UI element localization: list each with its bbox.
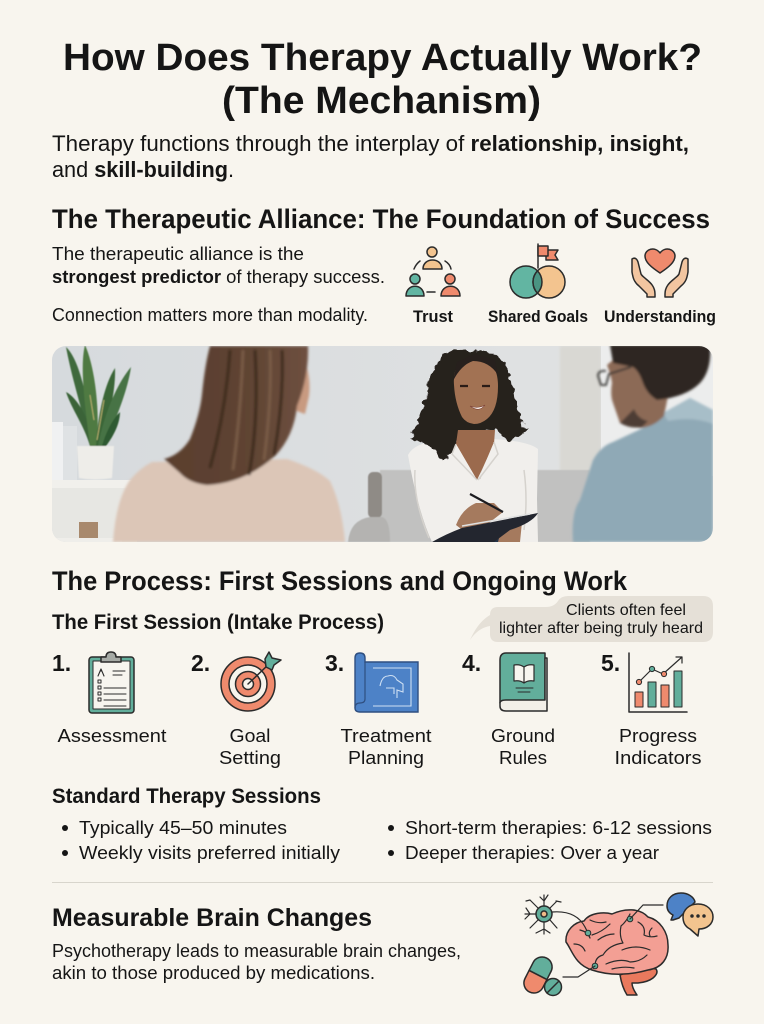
step 5: progress indicators: Progress bbox=[619, 725, 697, 746]
step 3: treatment planning: Treatment bbox=[340, 725, 432, 746]
step 5: progress indicators: 5. bbox=[601, 650, 620, 676]
label: shared goals: Shared Goals bbox=[488, 308, 588, 326]
icon: trust bbox=[406, 247, 460, 296]
icon: understanding bbox=[632, 249, 688, 297]
icon: shared goals bbox=[510, 244, 565, 298]
callout: clients feel lighter: Clients often feel bbox=[566, 602, 686, 619]
step 4: ground rules: 4. bbox=[462, 650, 481, 676]
step 1: assessment bbox=[52, 650, 166, 746]
step 5: progress indicators: Indicators bbox=[614, 747, 702, 768]
intro text second line: and skill-building. bbox=[52, 157, 234, 182]
sofa bbox=[348, 470, 590, 542]
title: (The Mechanism) bbox=[222, 80, 541, 122]
bullet list: left bbox=[62, 817, 341, 863]
step 2: goal setting bbox=[191, 650, 281, 768]
heading: therapeutic alliance: The Therapeutic Alliance: The Foundation of Success bbox=[52, 204, 710, 234]
photo: therapy session bbox=[52, 345, 713, 542]
pills bbox=[520, 954, 562, 996]
step 1: assessment: Assessment bbox=[58, 725, 166, 746]
icon: book bbox=[500, 653, 547, 711]
title bbox=[63, 37, 702, 122]
label: understanding: Understanding bbox=[604, 308, 716, 326]
label: trust: Trust bbox=[413, 308, 453, 326]
step 4: ground rules: Rules bbox=[499, 747, 547, 768]
callout: clients feel lighter bbox=[470, 596, 713, 642]
alliance text block: strongest predictor of therapy success. bbox=[52, 267, 385, 287]
intro text: Therapy functions through the interplay of relationship, insight, bbox=[52, 131, 689, 156]
brain changes text bbox=[52, 941, 461, 983]
brain changes text: akin to those produced by medications. bbox=[52, 963, 375, 983]
step 4: ground rules: Ground bbox=[491, 725, 555, 746]
step 5: progress indicators bbox=[601, 650, 702, 768]
bullet list: right: Short-term therapies: 6-12 sessions bbox=[405, 817, 712, 838]
step 2: goal setting: Goal bbox=[230, 725, 270, 746]
icon: target bbox=[221, 652, 281, 711]
chat bubbles bbox=[667, 893, 713, 936]
step 2: goal setting: 2. bbox=[191, 650, 210, 676]
bullet list: right: Deeper therapies: Over a year bbox=[405, 842, 659, 863]
icon: blueprint bbox=[355, 653, 418, 712]
neuron bbox=[525, 895, 588, 934]
step 4: ground rules bbox=[462, 650, 555, 768]
step 2: goal setting: Setting bbox=[219, 747, 281, 768]
plant bbox=[66, 345, 131, 480]
bullet list: left: Typically 45–50 minutes bbox=[79, 817, 287, 838]
brain changes text: Psychotherapy leads to measurable brain changes, bbox=[52, 941, 461, 961]
man seen from behind bbox=[573, 345, 713, 542]
alliance text block: The therapeutic alliance is the bbox=[52, 244, 304, 264]
step 3: treatment planning: 3. bbox=[325, 650, 344, 676]
alliance text block: Connection matters more than modality. bbox=[52, 305, 368, 325]
title: How Does Therapy Actually Work? bbox=[63, 37, 702, 79]
heading: standard therapy sessions: Standard Therapy Sessions bbox=[52, 785, 321, 808]
step 1: assessment: 1. bbox=[52, 650, 71, 676]
callout: clients feel lighter: lighter after being truly heard bbox=[499, 620, 703, 637]
icon: brain with neuron, chat and pills bbox=[520, 893, 713, 996]
step 3: treatment planning bbox=[325, 650, 432, 768]
icon: clipboard bbox=[89, 652, 134, 713]
bullet list: right bbox=[388, 817, 712, 863]
icon: bar chart bbox=[629, 653, 687, 712]
bullet list: left: Weekly visits preferred initially bbox=[79, 842, 341, 863]
brain bbox=[566, 910, 668, 995]
woman seen from behind bbox=[113, 346, 345, 542]
heading: the process: The Process: First Sessions and Ongoing Work bbox=[52, 566, 627, 596]
step 3: treatment planning: Planning bbox=[348, 747, 424, 768]
heading: first session: The First Session (Intake Process) bbox=[52, 611, 384, 634]
heading: measurable brain changes: Measurable Brain Changes bbox=[52, 904, 372, 932]
alliance text block bbox=[52, 244, 385, 325]
therapist bbox=[408, 350, 538, 542]
